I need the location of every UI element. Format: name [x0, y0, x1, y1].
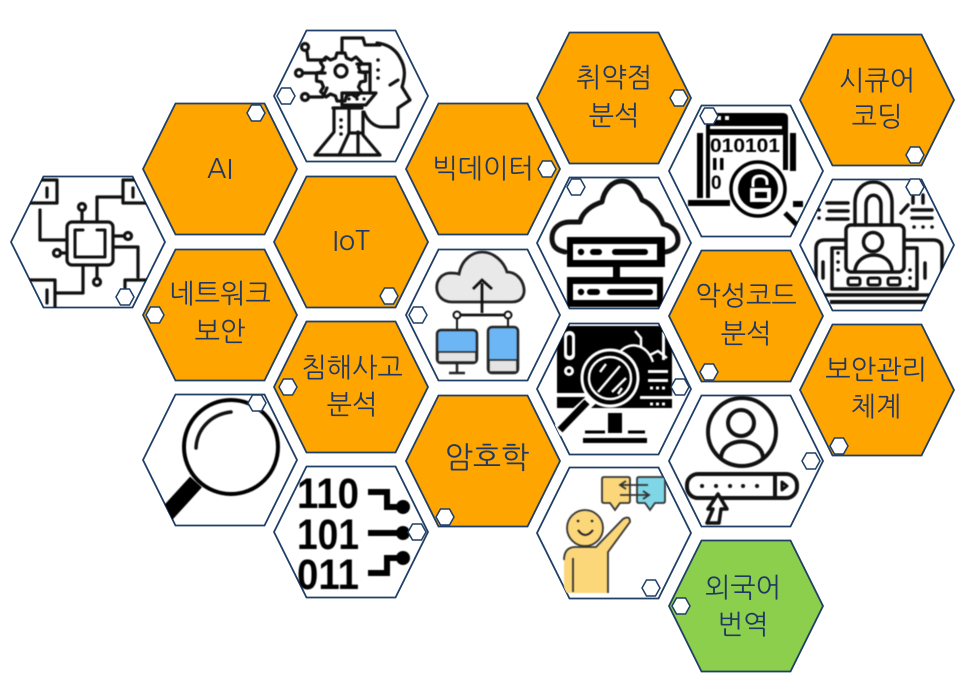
- small hexagon marker: [567, 179, 585, 195]
- panel: big data: [406, 104, 560, 234]
- small hexagon marker: [671, 379, 689, 395]
- panel: foreign language translation: [669, 540, 823, 672]
- small hexagon marker: [247, 105, 265, 121]
- small hexagon marker: [146, 307, 164, 323]
- panel: binary laptop icon hexagon: [669, 106, 823, 236]
- label: IoT: [332, 227, 370, 254]
- label: 코딩: [852, 103, 902, 130]
- label: 빅데이터: [432, 155, 534, 182]
- panel: AI head icon hexagon: [274, 30, 428, 162]
- small hexagon marker: [277, 88, 295, 104]
- small hexagon marker: [436, 509, 454, 525]
- panel: lock icon hexagon: [800, 179, 954, 310]
- panel: cryptography: [406, 396, 560, 526]
- panel: person with translation bubbles icon hexagon: [537, 468, 691, 598]
- small hexagon marker: [700, 108, 718, 124]
- small hexagon marker: [700, 364, 718, 380]
- panel: vulnerability analysis: [537, 32, 691, 164]
- small hexagon marker: [409, 307, 427, 323]
- icon: smiling person pointing at speech bubbles: [564, 477, 665, 593]
- icon: binary digits with circuit lines: 101: [297, 511, 359, 559]
- panel: binary circuit icon hexagon: [274, 466, 428, 599]
- label: 취약점: [576, 64, 652, 91]
- label: 보안: [195, 318, 245, 345]
- panel: cloud upload icon hexagon: [406, 250, 560, 380]
- small hexagon marker: [672, 598, 690, 614]
- label: 보안관리: [825, 356, 927, 383]
- panel: secure coding: [800, 34, 954, 166]
- icon: binary digits with circuit lines: 110: [297, 470, 359, 518]
- icon: laptop with binary and magnifier: [688, 113, 803, 225]
- small hexagon marker: [906, 179, 924, 195]
- panel: IoT: [274, 176, 428, 308]
- small hexagon marker: [670, 90, 688, 106]
- small hexagon marker: [830, 438, 848, 454]
- small hexagon marker: [116, 289, 134, 305]
- icon: cloud upload to devices: [437, 252, 524, 373]
- label: 분석: [327, 391, 377, 418]
- small hexagon marker: [248, 395, 266, 411]
- icon: laptop with binary and magnifier: 0: [711, 173, 722, 194]
- label: 외국어: [705, 574, 781, 601]
- label: 침해사고: [301, 354, 403, 381]
- label: 분석: [589, 102, 639, 129]
- label: 체계: [851, 393, 901, 420]
- panel: cloud server icon hexagon: [537, 178, 691, 308]
- label: AI: [207, 155, 233, 182]
- icon: cloud server: [552, 181, 678, 307]
- panel: magnifier icon hexagon: [143, 394, 297, 526]
- icon: circuit chip: [30, 180, 150, 308]
- small hexagon marker: [642, 580, 660, 596]
- icon: binary digits with circuit lines: [298, 478, 411, 590]
- label: 네트워크: [169, 280, 271, 307]
- icon: laptop with binary and magnifier: 010101: [710, 136, 780, 157]
- panel: malware analysis: [669, 250, 823, 382]
- icon: monitor with bug and magnifier: [556, 326, 672, 443]
- label: 번역: [718, 611, 768, 638]
- small hexagon marker: [802, 453, 820, 469]
- icon: magnifying glass: [165, 400, 278, 516]
- panel: network security: [143, 250, 297, 380]
- label: 시큐어: [839, 67, 915, 94]
- small hexagon marker: [408, 524, 426, 540]
- panel: security management system: [800, 324, 954, 456]
- panel: password login icon hexagon: [669, 396, 823, 526]
- panel: intrusion incident analysis: [274, 322, 428, 452]
- panel: AI: [143, 104, 297, 234]
- label: 암호학: [445, 443, 529, 473]
- small hexagon marker: [538, 161, 556, 177]
- icon: padlock with user on tablet: [816, 182, 942, 302]
- icon: user avatar and password field: [687, 398, 797, 523]
- small hexagon marker: [279, 379, 297, 395]
- label: 분석: [721, 320, 771, 347]
- panel: bug on monitor icon hexagon: [537, 324, 691, 454]
- small hexagon marker: [380, 288, 398, 304]
- icon: robot head with gear: [296, 38, 410, 155]
- label: 악성코드: [695, 282, 797, 309]
- panel: chip icon hexagon: [11, 176, 165, 308]
- small hexagon marker: [906, 147, 924, 163]
- icon: binary digits with circuit lines: 011: [297, 551, 359, 599]
